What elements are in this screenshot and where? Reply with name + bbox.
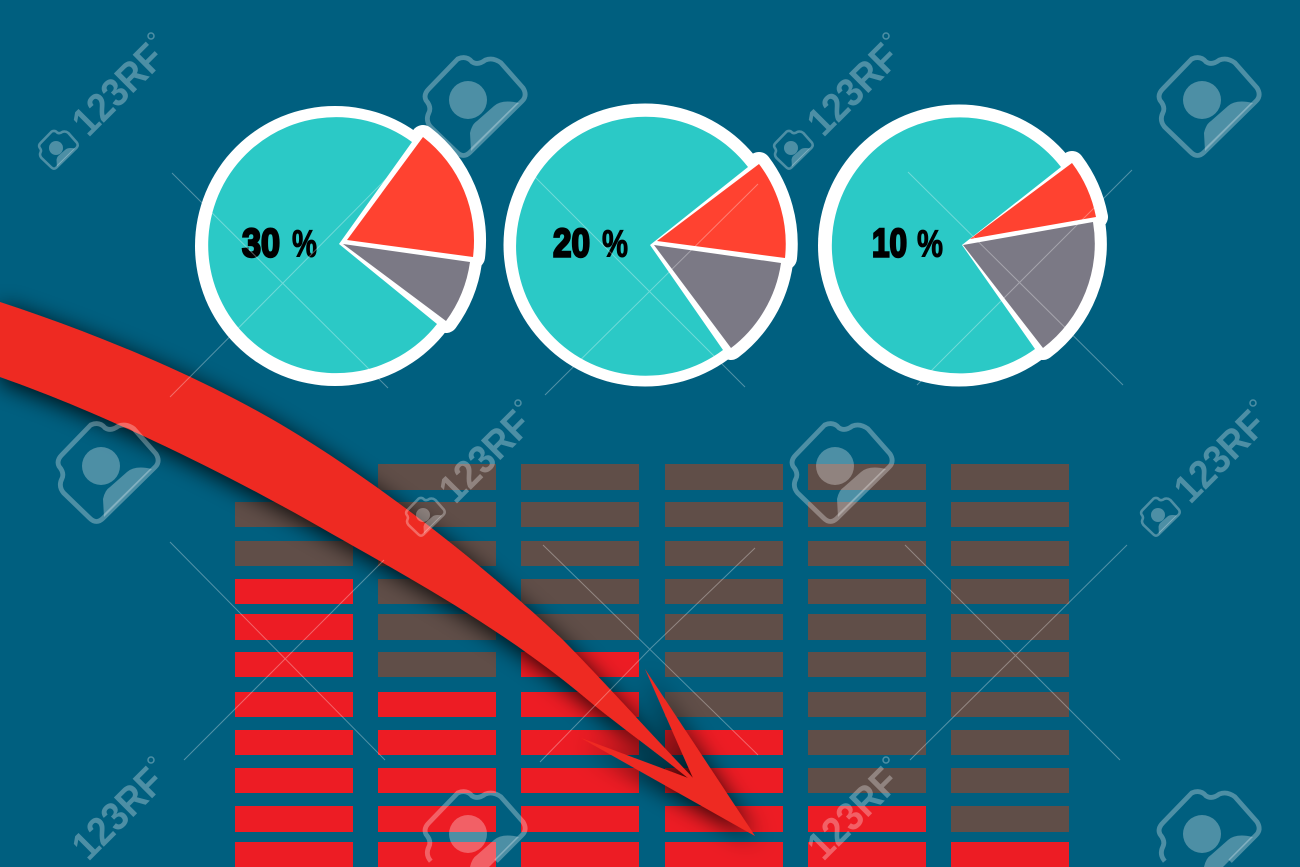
10 % grey slice [963, 222, 1095, 348]
arrow: downward trend [0, 302, 755, 836]
watermark icon 4 [792, 424, 892, 521]
watermark logo bottom left: 123RF [64, 759, 173, 867]
watermark icon 2 [1159, 58, 1259, 155]
watermark logo middle right [1141, 400, 1275, 536]
watermark logo middle right: 123RF [1166, 402, 1275, 511]
30 % grey slice [343, 244, 470, 321]
watermark icon 3 [58, 424, 158, 521]
20 % red slice [657, 164, 786, 258]
watermark logo middle left [406, 400, 540, 536]
20 % label: 20 [553, 222, 590, 266]
pie chart: 10 % [818, 104, 1100, 386]
column 4 bars [665, 464, 783, 867]
pie chart: 30 % [195, 106, 475, 386]
pie chart: 20 % [504, 104, 786, 386]
20 % label: % [602, 224, 628, 266]
watermark icon 1 [425, 58, 525, 155]
30 % label [242, 222, 317, 266]
30 % label: % [292, 224, 317, 266]
20 % label [553, 222, 628, 266]
watermark logo top centre [774, 33, 908, 169]
10 % red slice [970, 163, 1096, 239]
30 % label: 30 [242, 222, 280, 266]
20 % grey slice [654, 245, 781, 348]
column 5 bars [808, 464, 926, 867]
10 % label: 10 [872, 222, 907, 266]
column 3 bars [521, 464, 639, 867]
bar chart [235, 464, 1069, 867]
column 6 bars [951, 464, 1069, 867]
30 % red slice [347, 137, 474, 257]
watermark logo middle left: 123RF [431, 402, 540, 511]
watermark icon 5 [425, 792, 525, 867]
watermark logo top centre: 123RF [799, 35, 908, 144]
watermark icon 6 [1159, 792, 1259, 867]
watermark logo top left [39, 33, 173, 169]
column 2 bars [378, 464, 496, 867]
watermark logo top left: 123RF [64, 35, 173, 144]
watermark logo bottom centre: 123RF [799, 759, 908, 867]
column 1 bars [235, 502, 353, 867]
10 % label [872, 222, 943, 266]
10 % label: % [917, 224, 943, 266]
